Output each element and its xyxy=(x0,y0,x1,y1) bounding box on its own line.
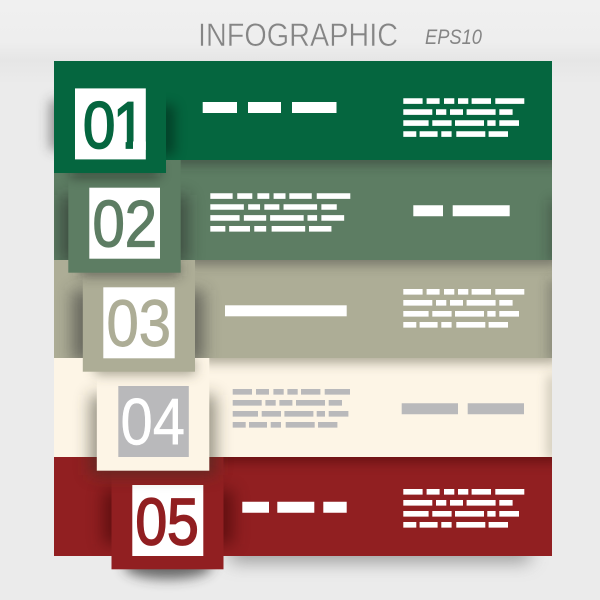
square shadow 03 xyxy=(72,290,204,362)
panel: band 04 xyxy=(54,358,552,457)
band shadow from band 04 xyxy=(224,457,552,467)
number tile 01: 1 xyxy=(113,90,145,163)
subheading: EPS10: EPS10 xyxy=(425,26,482,49)
shadow of tile 03 on band 04 xyxy=(95,360,195,374)
number tile 03: 03 xyxy=(106,288,171,361)
band shadow from band 01 xyxy=(180,160,552,169)
number tile 04: 04 xyxy=(120,386,185,459)
shadows beneath the block xyxy=(117,556,540,588)
heading: INFOGRAPHIC: INFOGRAPHIC xyxy=(198,17,398,53)
number tile 04 xyxy=(97,358,209,471)
number tile 03 xyxy=(83,260,195,372)
side shadow of tile 01 xyxy=(166,101,180,159)
heading bars 04 xyxy=(402,403,524,414)
text block 04 xyxy=(233,389,350,428)
heading bars 05 xyxy=(242,502,347,513)
heading bars 02 xyxy=(413,205,510,216)
number tile 02: 02 xyxy=(92,188,157,261)
square shadow 04 xyxy=(90,395,216,475)
panel: band 01 xyxy=(50,61,552,177)
number tile 01 xyxy=(54,61,166,173)
number tile 05: 05 xyxy=(136,486,199,560)
text block 05 xyxy=(403,489,524,528)
heading bars 01 xyxy=(203,102,336,113)
right edge shadow 03 xyxy=(550,280,557,362)
right edge shadow 02 xyxy=(550,200,556,264)
bottom shadow of tile 01 xyxy=(70,165,160,177)
title xyxy=(198,17,482,53)
shadow of tile 02 on band 03 xyxy=(80,262,180,276)
number tile 02 xyxy=(68,160,181,273)
panel: band 05 xyxy=(54,449,560,569)
text block 03 xyxy=(403,289,524,328)
left shadow of tile 01 xyxy=(50,100,70,150)
square shadow 02 xyxy=(60,195,188,263)
panel: band 03 xyxy=(54,260,552,358)
square shadow 05 xyxy=(103,490,233,544)
masks for the numeral foot xyxy=(112,142,146,150)
number tile 01: 0 xyxy=(83,90,115,163)
heading bar 03 xyxy=(225,305,347,316)
text block 02 xyxy=(210,193,350,232)
right edge shadow 04 xyxy=(549,375,557,460)
number tile 05 xyxy=(112,457,224,569)
band shadow from band 02 xyxy=(195,260,552,270)
band shadow from band 03 xyxy=(209,358,552,370)
text block 01 xyxy=(403,98,524,137)
panel: band 04 tile and text xyxy=(97,358,524,471)
panel: band 02 xyxy=(54,160,552,260)
